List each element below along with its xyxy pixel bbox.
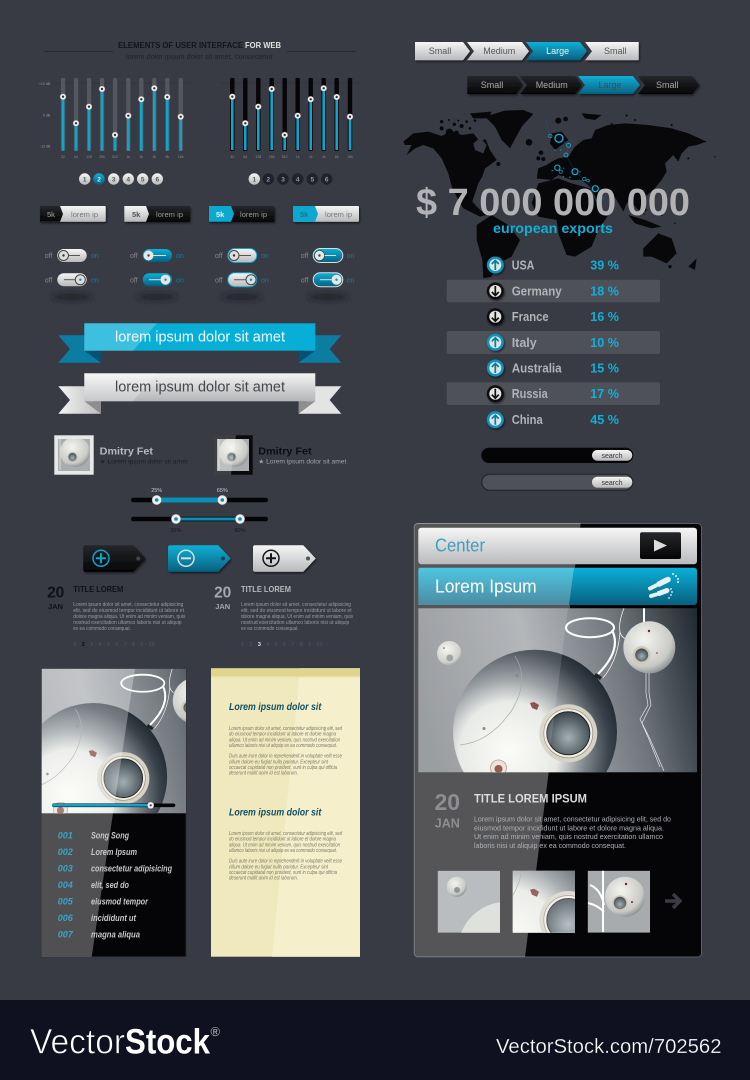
track list: elit, sed do <box>91 880 129 890</box>
note block 1: occaecat cupidatat non proident, sunt in culpa qui officia <box>229 765 337 771</box>
button Lorem Ipsum: Lorem Ipsum <box>435 576 537 596</box>
equalizer light: 8k <box>165 155 169 159</box>
pagination dark: 6 <box>325 176 329 183</box>
note block 2: aliqua. Ut enim ad minim veniam, quis nostrud exercitation <box>229 842 340 848</box>
note block 1: aliqua. Ut enim ad minim veniam, quis nostrud exercitation <box>229 737 340 743</box>
row France: 16 % <box>590 310 619 324</box>
equalizer dark: 1k <box>296 155 300 159</box>
note block 2 <box>229 806 343 882</box>
pagination light <box>79 173 163 185</box>
equalizer dark: 4k <box>322 155 326 159</box>
equalizer dark: 256 <box>269 155 275 159</box>
note block 1: do eiusmod tempor incididunt ut labore et dolore magna <box>229 732 336 738</box>
main illustration <box>418 608 697 772</box>
heading block <box>44 41 356 61</box>
equalizer light: 16k <box>178 155 184 159</box>
toggle switches column 3: off <box>215 253 223 260</box>
equalizer dark: 512 <box>282 155 288 159</box>
news item dark: ex ea commodo consequat. <box>73 626 131 632</box>
news item light: elit, sed do eiusmod tempor incididunt ut labore et <box>241 608 352 614</box>
player panel <box>42 668 186 957</box>
registered mark: ® <box>210 1024 220 1039</box>
equalizer light: 1k <box>126 155 130 159</box>
toggle switches column 3: off <box>215 278 223 284</box>
news item light: nostrud exercitation ullamco laboris nisi ut aliquip <box>241 620 349 626</box>
row Germany <box>487 282 619 300</box>
search bar dark <box>481 448 633 463</box>
breadcrumb dark <box>467 76 699 94</box>
note block 1: Lorem ipsum dolor sit <box>229 701 322 713</box>
track list: Song Song <box>91 830 129 840</box>
button Center <box>418 528 697 564</box>
equalizer light: 64 <box>74 155 78 159</box>
profile card light: ★ Lorem ipsum dolor sit amet <box>100 458 188 465</box>
news item dark: TITLE LOREM <box>73 584 123 594</box>
button Center: Center <box>435 536 485 556</box>
range slider 2: 80% <box>234 528 246 534</box>
equalizer light: 128 <box>86 155 92 159</box>
tag button 2: lorem ip <box>156 210 183 219</box>
equalizer light: 256 <box>99 155 105 159</box>
pagination dark: 3 <box>281 176 285 183</box>
pagination dark: 5 <box>310 176 314 183</box>
toggle switches column 3: on <box>261 278 269 284</box>
ribbon blue <box>58 323 341 363</box>
equalizer dark: 32 <box>230 155 234 159</box>
big figure: $ 7 000 000 000 <box>416 182 690 224</box>
row USA <box>487 256 619 274</box>
subtitle: european exports <box>493 220 613 236</box>
pagination dark: 2 <box>266 176 270 183</box>
tag button 3 <box>209 206 274 222</box>
arrow next <box>665 894 680 908</box>
range slider 2: 35% <box>170 528 182 534</box>
news item light: JAN <box>215 602 230 611</box>
track list: eiusmod tempor <box>91 896 148 906</box>
player progress <box>52 802 175 808</box>
date: 20 <box>435 789 460 815</box>
note block 2: occaecat cupidatat non proident, sunt in culpa qui officia <box>229 870 337 876</box>
breadcrumb dark: Medium <box>536 80 568 90</box>
breadcrumb light: Large <box>546 46 569 56</box>
range slider 1: 25% <box>151 488 162 494</box>
row France: France <box>512 310 549 324</box>
row Australia: Australia <box>512 362 563 376</box>
pagination light: 1 <box>83 176 87 183</box>
tag button 1: 5k <box>47 210 55 219</box>
range slider 2 <box>131 514 268 534</box>
note block 1: cillum dolore eu fugiat nulla pariatur. Excepteur sint <box>229 759 328 765</box>
pagination light: 3 <box>112 176 116 183</box>
news item light: dolore magna aliqua. Ut enim ad minim veniam, quis <box>241 614 353 620</box>
row China <box>487 411 619 428</box>
tag button 1: lorem ip <box>71 210 98 219</box>
article text: eiusmod tempor incididunt ut labore et dolore magna aliqua. <box>474 823 664 832</box>
note block 1: deserunt mollit anim id est laborum. <box>229 771 298 777</box>
row Russia <box>487 385 619 402</box>
track list <box>58 830 172 940</box>
toggle switches column 1: off <box>45 253 52 260</box>
equalizer light: 4k <box>152 155 156 159</box>
row China: China <box>512 413 544 427</box>
row USA: USA <box>512 258 534 272</box>
profile card light: Dmitry Fet <box>100 445 154 457</box>
toggle switches column 4: on <box>347 253 355 260</box>
pagination light: 5 <box>141 176 145 183</box>
track list: Lorem Ipsum <box>91 847 137 857</box>
row Italy <box>487 334 619 351</box>
toggle switches column 1: off <box>45 278 52 284</box>
toggle switches column 2: on <box>176 278 184 284</box>
label tag plus dark <box>83 545 146 572</box>
row Italy: Italy <box>512 336 537 350</box>
article text: Lorem ipsum dolor sit amet, consectetur adipisicing elit, sed do <box>474 814 671 823</box>
thumbnail 1 <box>438 870 500 933</box>
track list: 006 <box>58 913 74 923</box>
toggle switches column 1: on <box>91 278 99 284</box>
pagination dark <box>249 173 332 185</box>
row Russia: Russia <box>512 387 549 401</box>
pagination light: 4 <box>126 176 130 183</box>
note block 1: Lorem ipsum dolor sit amet, consectetur adipisicing elit, sed <box>229 726 343 732</box>
search bar dark: search <box>601 453 623 460</box>
equalizer light: -12 dB <box>40 144 51 148</box>
track list: magna aliqua <box>91 930 140 940</box>
news item light: TITLE LOREM <box>241 584 291 594</box>
pagination light: 2 <box>97 176 101 183</box>
news item light <box>214 584 353 648</box>
heading block: FOR WEB <box>245 41 281 50</box>
row Russia: 17 % <box>590 387 619 401</box>
tag button 4 <box>293 206 359 222</box>
news item dark <box>47 584 186 648</box>
player image <box>42 668 186 814</box>
profile card light <box>54 435 188 475</box>
ribbon white <box>58 373 341 414</box>
thumbnail 3 <box>588 870 650 933</box>
news item light: ex ea commodo consequat. <box>241 626 299 632</box>
breadcrumb light: Small <box>429 46 451 56</box>
note block 2: Lorem ipsum dolor sit <box>229 806 322 818</box>
breadcrumb light <box>415 42 639 60</box>
equalizer dark: 64 <box>243 155 247 159</box>
tag button 3: 5k <box>216 210 225 219</box>
news item light: Lorem ipsum dolor sit amet, consectetur adipisicing <box>241 602 351 608</box>
note block 2: Lorem ipsum dolor sit amet, consectetur adipisicing elit, sed <box>229 831 343 837</box>
news item dark: elit, sed do eiusmod tempor incididunt ut labore et <box>73 608 184 614</box>
toggle switches column 2 <box>130 249 184 300</box>
equalizer light: +12 dB <box>39 82 51 86</box>
track list: 007 <box>58 930 74 940</box>
toggle switches column 2: off <box>130 253 138 260</box>
pagination light: 6 <box>155 176 159 183</box>
news item dark: nostrud exercitation ullamco laboris nisi ut aliquip <box>73 620 182 626</box>
footer band <box>0 1000 750 1080</box>
row China: 45 % <box>590 413 619 427</box>
equalizer dark: 16k <box>347 155 353 159</box>
news item light: 20 <box>214 584 231 601</box>
breadcrumb dark: Small <box>481 80 503 90</box>
toggle switches column 3 <box>215 248 269 300</box>
news item dark: 20 <box>47 584 64 601</box>
note block 2: do eiusmod tempor incididunt ut labore et dolore magna <box>229 837 336 843</box>
breadcrumb dark: Small <box>656 80 679 90</box>
label tag plus white <box>253 545 316 572</box>
range slider 1: 65% <box>217 488 228 494</box>
news item dark: 1 · 2 · 3 · 4 · 5 · 6 · 7 · 8 · 9 · 10 <box>73 642 155 648</box>
toggle switches column 1 <box>45 249 99 300</box>
toggle switches column 4 <box>301 248 355 300</box>
ribbon blue: lorem ipsum dolor sit amet <box>115 330 285 346</box>
track list: 004 <box>58 880 73 890</box>
logo: VectorStock <box>30 1022 210 1061</box>
world map <box>403 110 716 278</box>
date: JAN <box>435 817 460 831</box>
track list: incididunt ut <box>91 913 137 923</box>
toggle switches column 1: on <box>91 253 99 260</box>
image id: VectorStock.com/702562 <box>496 1036 722 1058</box>
article text: TITLE LOREM IPSUM <box>474 792 587 806</box>
date <box>435 789 460 831</box>
equalizer dark: 128 <box>255 155 261 159</box>
track list: consectetur adipisicing <box>91 864 172 874</box>
tag button 4: 5k <box>300 210 309 219</box>
tag button 3: lorem ip <box>240 210 267 219</box>
news item dark: Lorem ipsum dolor sit amet, consectetur adipisicing <box>73 602 183 608</box>
track list: 005 <box>58 896 74 906</box>
toggle switches column 4: off <box>301 253 308 260</box>
row Germany: 18 % <box>590 284 619 298</box>
row Australia: 15 % <box>590 362 619 376</box>
note block 2: cillum dolore eu fugiat nulla pariatur. Excepteur sint <box>229 864 328 870</box>
equalizer light: 512 <box>112 155 118 159</box>
note block 2: Duis aute irure dolor in reprehenderit in voluptate velit esse <box>229 859 342 865</box>
news item dark: dolore magna aliqua. Ut enim ad minim veniam, quis <box>73 614 186 620</box>
note block 1 <box>229 701 343 777</box>
equalizer dark: 8k <box>335 155 339 159</box>
track list: 003 <box>58 864 73 874</box>
equalizer light: 2k <box>139 155 143 159</box>
equalizer light: 32 <box>61 155 65 159</box>
breadcrumb light: Medium <box>483 46 515 56</box>
tag button 4: lorem ip <box>325 210 352 219</box>
heading block: lorem dolor ipsum dolor sit amet, consectetur <box>126 52 273 61</box>
equalizer dark <box>220 78 362 159</box>
toggle switches column 3: on <box>261 253 269 260</box>
track list: 001 <box>58 830 73 840</box>
article text: laboris nisi ut aliquip ex ea commodo consequat. <box>474 841 626 850</box>
note block 2: ullamco laboris nisi ut aliquip ex ea commodo consequat. <box>229 848 337 854</box>
yellow note panel <box>211 668 360 957</box>
equalizer light: 0 dB <box>43 114 51 118</box>
search bar light <box>482 474 633 490</box>
article text <box>474 792 671 850</box>
news item dark: JAN <box>48 602 63 611</box>
row France <box>487 308 619 325</box>
heading block: ELEMENTS OF USER INTERFACE <box>118 41 244 50</box>
equalizer light <box>39 78 192 159</box>
pagination dark: 1 <box>252 176 256 183</box>
toggle switches column 4: on <box>347 278 355 284</box>
profile card dark: Dmitry Fet <box>258 445 312 457</box>
button Lorem Ipsum <box>418 568 697 605</box>
breadcrumb light: Small <box>604 46 627 56</box>
note block 1: ullamco laboris nisi ut aliquip ex ea commodo consequat. <box>229 743 337 749</box>
search bar light: search <box>601 480 623 487</box>
thumbnail 2 <box>512 870 575 933</box>
tag button 2: 5k <box>132 210 141 219</box>
media card large <box>414 523 702 958</box>
toggle switches column 4: off <box>301 278 308 284</box>
toggle switches column 2: on <box>176 253 184 260</box>
profile card dark: ★ Lorem ipsum dolor sit amet <box>258 458 347 465</box>
breadcrumb dark: Large <box>598 80 622 90</box>
tag button 1 <box>40 206 106 222</box>
row Australia <box>487 360 619 376</box>
pagination dark: 4 <box>296 176 300 183</box>
profile card dark <box>213 435 347 475</box>
note block 2: deserunt mollit anim id est laborum. <box>229 876 298 882</box>
row Germany: Germany <box>512 284 562 298</box>
article text: Ut enim ad minim veniam, quis nostrud exercitation ullamco <box>474 832 663 841</box>
ribbon white: lorem ipsum dolor sit amet <box>115 380 285 396</box>
row USA: 39 % <box>590 258 619 272</box>
toggle switches column 2: off <box>130 278 138 284</box>
row Italy: 10 % <box>590 336 619 350</box>
track list: 002 <box>58 847 73 857</box>
note block 1: Duis aute irure dolor in reprehenderit in voluptate velit esse <box>229 754 342 760</box>
exports table <box>447 256 660 428</box>
news item light: 1 · 2 · 3 · 4 · 5 · 6 · 7 · 8 · 9 · 10 <box>241 642 323 648</box>
label tag minus blue <box>168 545 231 572</box>
tag button 2 <box>124 206 190 222</box>
equalizer dark: 2k <box>309 155 313 159</box>
range slider 1 <box>131 488 268 505</box>
